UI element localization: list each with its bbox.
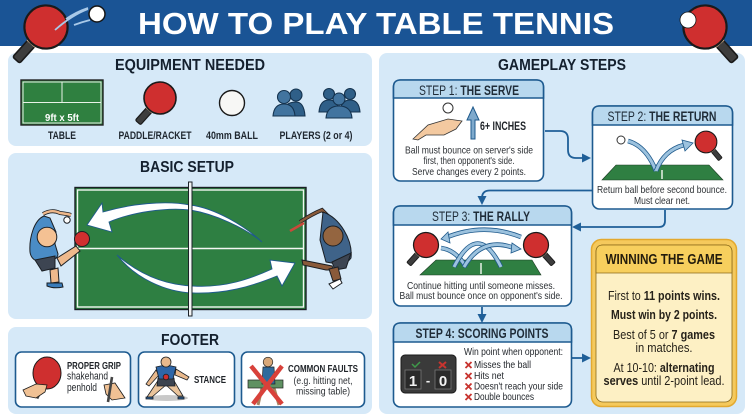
icon: stance figure [146,357,189,401]
text: serve rules: Serve changes every 2 points. [412,166,526,178]
icon: table [21,80,103,125]
label: stance: STANCE [194,374,226,386]
text: serve rules: Ball must bounce on server's side [405,144,533,156]
heading: gameplay steps: GAMEPLAY STEPS [498,57,626,74]
player: left [30,211,90,288]
heading: equipment needed: EQUIPMENT NEEDED [115,57,265,74]
icon: ball on open hand [413,103,462,140]
card: step 1 [394,80,544,181]
text: serve rules [405,144,533,178]
arrow: step 4 to winning [571,357,586,359]
panel: gameplay steps [379,53,745,414]
icon: paddle [126,75,183,133]
icon: four players [319,88,360,118]
step title: STEP 1: THE SERVE [419,82,519,98]
arrow: step 2 to step 3 [482,190,592,200]
arrow: upper return [87,203,262,242]
icon: scoreboard: 1 [409,373,417,390]
text: win rules: serves until 2-point lead. [604,373,724,388]
diagram: table top view [75,182,306,316]
text: fault examples: (e.g. hitting net, [294,375,352,387]
heading: footer: FOOTER [161,332,219,349]
text: win rules: Must win by 2 points. [611,307,717,322]
arrow: step 2 down to step 3 side [577,210,665,227]
card: step 2 [592,106,732,209]
net [188,182,192,316]
icon: upward arrow [467,107,479,139]
player: right [290,210,351,289]
arrow: lower shot [117,255,295,293]
label: table: TABLE [48,130,76,142]
text: win point list: Win point when opponent: [464,346,563,358]
arrow: step 1 to step 2 [545,131,586,158]
icon: ball [220,90,244,116]
text: win rules: First to 11 points wins. [608,288,720,303]
header banner [0,0,752,46]
text: win rules [604,288,724,388]
text: win rules: Best of 5 or 7 games [613,327,715,342]
text: rally rules [400,280,562,302]
label: 40mm ball: 40mm BALL [206,130,258,142]
diagram: bounce on table [602,127,729,180]
label: common faults: COMMON FAULTS [288,363,358,375]
panel: basic setup [8,153,372,319]
icon: table: 9ft x 5ft [45,112,79,124]
icon: scoreboard: 0 [439,373,447,390]
text: return rules [597,184,727,207]
card: common faults [242,352,364,407]
card: step 4 [394,323,572,407]
diagram: rally [400,227,562,275]
text: serve rules: first, then opponent's side. [424,155,514,167]
icon: faults crossed out [248,357,283,405]
text: shakehand: shakehand [67,370,108,382]
icon: right paddle and ball [674,0,751,75]
card: step 3 [394,206,572,306]
card: stance [138,352,234,407]
text: win rules: in matches. [636,340,692,355]
panel: winning the game [592,240,736,406]
icon: scoreboard [401,355,456,393]
text: penhold: penhold [67,382,97,394]
panel: equipment needed [8,53,372,146]
label: players: PLAYERS (2 or 4) [280,130,353,142]
text: rally rules: Continue hitting until someone misses. [407,280,555,292]
icon: scoreboard: - [426,373,430,388]
text: win point list: Double bounces [474,391,534,403]
card: proper grip [16,352,130,407]
text: win point list: Hits net [474,370,504,382]
arrow: step 3 to step 4 [481,307,483,318]
title: HOW TO PLAY TABLE TENNIS [138,6,614,41]
icon: grip paddle [23,357,61,398]
step title: STEP 3: THE RALLY [432,208,530,224]
icon: left paddle and flying ball [0,0,105,75]
text: rally rules: Ball must bounce once on opponent's side. [400,290,562,302]
text: win point list: Doesn't reach your side [474,380,563,392]
label: paddle/racket: PADDLE/RACKET [118,130,192,142]
icon: two players [273,89,305,116]
card: common faults: missing table) [296,386,350,398]
text: return rules: Must clear net. [634,195,690,207]
heading: winning the game: WINNING THE GAME [606,252,723,268]
panel: footer [8,327,372,414]
text: win point list: Misses the ball [474,359,531,371]
step title: STEP 2: THE RETURN [608,108,716,124]
heading: basic setup: BASIC SETUP [140,159,234,176]
step title: STEP 4: SCORING POINTS [416,325,548,341]
text: win point list [464,346,563,403]
label: proper grip: PROPER GRIP [67,360,121,372]
icon: penhold hand [104,377,125,402]
text: win rules: At 10-10: alternating [614,360,715,375]
label: 6+ inches: 6+ INCHES [480,121,526,133]
